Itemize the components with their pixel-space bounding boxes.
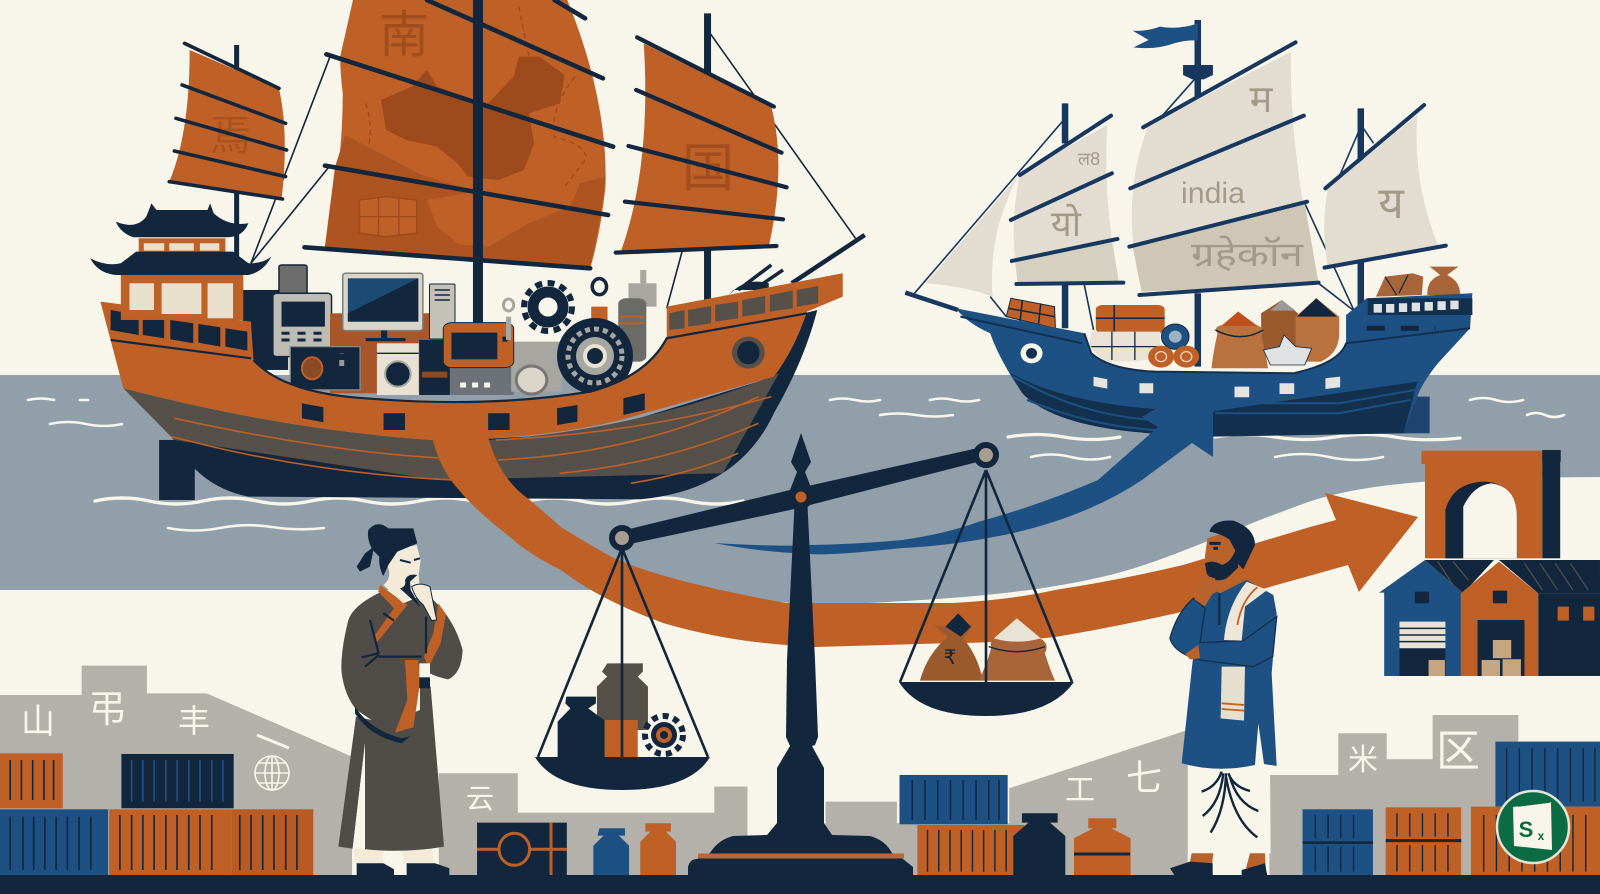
folded arm and forearm bbox=[1170, 598, 1277, 667]
sail script text: india bbox=[1181, 177, 1245, 210]
hem band bbox=[355, 707, 411, 743]
skyline script glyphs bbox=[21, 689, 1480, 814]
finial and pivot bbox=[789, 433, 813, 509]
blue export arrow bbox=[714, 375, 1213, 554]
waves bbox=[28, 398, 1564, 530]
sail script characters: 国 bbox=[682, 140, 734, 198]
beard bbox=[1205, 550, 1238, 580]
hat and tie bbox=[357, 524, 417, 576]
containers right bbox=[899, 742, 1600, 875]
orange sash bbox=[395, 660, 420, 733]
electronics and machinery cargo bbox=[242, 265, 657, 395]
skyline script glyphs: 丰 bbox=[178, 703, 210, 739]
scale column bbox=[688, 495, 913, 875]
orange trade arrow bbox=[432, 437, 1418, 647]
beam bbox=[625, 448, 985, 545]
watermark logo: S bbox=[1519, 817, 1533, 842]
robe detail lines bbox=[362, 613, 426, 667]
sea background bbox=[0, 375, 1600, 605]
indian sailing ship bbox=[905, 20, 1472, 437]
sail script characters: 南 bbox=[379, 7, 429, 63]
tucked hand bbox=[1185, 645, 1200, 659]
orange sleeve band bbox=[424, 603, 446, 667]
sail script text: यो bbox=[1051, 203, 1082, 244]
left sail bbox=[1014, 125, 1119, 283]
hair bbox=[1209, 521, 1255, 569]
skyline script glyphs: 山 bbox=[21, 703, 55, 741]
shoes bbox=[357, 863, 449, 875]
right sail bbox=[621, 43, 778, 252]
india rigging and masts bbox=[905, 20, 1374, 367]
watermark logo bbox=[1497, 791, 1569, 863]
orange warehouse bbox=[1461, 562, 1538, 676]
slit in robe bbox=[353, 743, 365, 849]
right hanger ring bbox=[976, 445, 996, 465]
eyes bbox=[400, 558, 420, 563]
dhoti bbox=[1188, 765, 1271, 853]
orange collar bbox=[375, 585, 407, 643]
ground strip bbox=[0, 875, 1600, 894]
beard bbox=[400, 575, 421, 607]
sail battens bbox=[169, 0, 787, 333]
lower robe bbox=[338, 687, 444, 851]
sail script text bbox=[1051, 79, 1405, 274]
skyline script glyphs: 弔 bbox=[88, 689, 126, 731]
chinese merchant bbox=[338, 524, 463, 875]
sail script text: म bbox=[1250, 79, 1274, 121]
right pan with money bag and grain sack: ₹ bbox=[944, 645, 956, 669]
right sail bbox=[1324, 115, 1438, 267]
sail battens bbox=[1011, 42, 1446, 295]
eye and brow bbox=[1209, 543, 1221, 548]
belt and undershirt bbox=[419, 663, 430, 688]
ankles bbox=[1189, 853, 1266, 868]
warehouses and gate bbox=[1379, 450, 1600, 676]
small crate and weights bbox=[477, 823, 676, 876]
right pan with money bag and grain sack bbox=[899, 470, 1074, 716]
upper robe and sleeves bbox=[341, 592, 463, 742]
chin hand bbox=[1195, 575, 1216, 606]
dhoti folds bbox=[1202, 772, 1258, 837]
spices textiles cargo bbox=[1006, 267, 1460, 368]
navy warehouse bbox=[1438, 560, 1600, 676]
watermark logo: x bbox=[1538, 829, 1545, 843]
sail script characters bbox=[209, 7, 734, 198]
arch gate bbox=[1421, 450, 1561, 558]
head bbox=[1205, 531, 1241, 581]
main sail with map bbox=[304, 0, 606, 268]
sail script text: ल8 bbox=[1078, 149, 1100, 169]
india hull bbox=[956, 293, 1472, 437]
hand bbox=[412, 584, 437, 621]
indian merchant bbox=[1170, 521, 1277, 876]
left pan with weights and gear bbox=[535, 548, 710, 790]
left sail bbox=[169, 50, 285, 200]
junk rigging and masts bbox=[237, 13, 865, 308]
sail script text: य bbox=[1378, 179, 1405, 228]
gears bbox=[524, 283, 633, 394]
shawl stripes bbox=[1222, 587, 1257, 711]
skyline script glyphs: 工 bbox=[1065, 774, 1095, 807]
skyline script glyphs: 云 bbox=[466, 783, 494, 814]
scale base stripe bbox=[698, 854, 904, 858]
chinese junk ship bbox=[90, 0, 865, 500]
containers left bbox=[0, 753, 313, 876]
kurta neck placket bbox=[1218, 593, 1220, 625]
blue warehouse bbox=[1379, 560, 1494, 676]
gray skyline left bbox=[0, 666, 747, 877]
jib sail bbox=[926, 177, 1018, 297]
merchant legs bbox=[353, 847, 435, 864]
sail script characters: 焉 bbox=[209, 112, 251, 159]
shawl lower bbox=[1221, 667, 1245, 721]
neck skin bbox=[1213, 578, 1243, 593]
junk hull bbox=[100, 273, 843, 500]
balance scale bbox=[535, 433, 1074, 875]
sail script text: ग्रहेकॉन bbox=[1191, 235, 1304, 274]
globe icon bbox=[255, 735, 289, 790]
flag and crow nest bbox=[1133, 23, 1213, 79]
kurta bbox=[1182, 580, 1277, 769]
pagoda deckhouse bbox=[90, 203, 271, 320]
main sail bbox=[1132, 52, 1319, 292]
sandals bbox=[1170, 862, 1267, 876]
skyline script glyphs: 米 bbox=[1348, 744, 1378, 777]
face and neck bbox=[383, 545, 421, 603]
gray skyline right bbox=[826, 715, 1600, 877]
skyline script glyphs: 区 bbox=[1436, 727, 1480, 776]
shawl upper bbox=[1224, 582, 1267, 641]
skyline script glyphs: 七 bbox=[1126, 757, 1162, 798]
left hanger ring bbox=[612, 528, 632, 548]
